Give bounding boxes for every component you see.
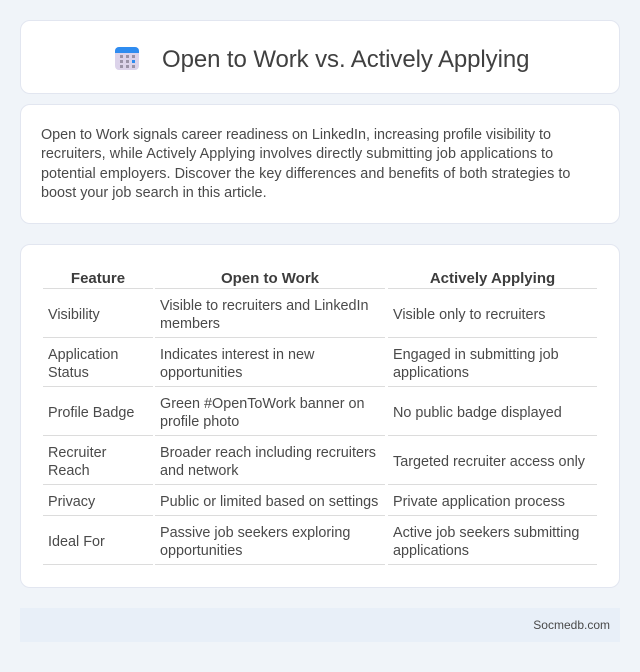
row: profile badge [43,396,597,436]
table header [43,270,597,289]
title: Open to Work vs. Actively Applying [162,46,529,73]
row: application status: Engaged in submitting job [393,347,559,363]
panel: introduction [20,104,620,224]
row: application status: opportunities [160,365,242,381]
row: visibility: Visible to recruiters and LinkedIn [160,298,369,314]
row: application status: Application [48,347,118,363]
row: application status: Indicates interest in new [160,347,314,363]
row: privacy [43,494,597,516]
row: application status: Status [48,365,89,381]
row: ideal for: Ideal For [48,534,105,550]
row: visibility: Visibility [48,307,100,323]
row: recruiter reach: Broader reach including recruiters [160,445,376,461]
panel: title card [20,20,620,94]
intro text: boost your job search in this article. [41,185,267,201]
table header: Actively Applying [430,270,555,287]
panel: comparison table [20,244,620,588]
table header: Open to Work [221,270,319,287]
row: privacy: Privacy [48,494,95,510]
icon: calendar [115,47,139,70]
intro text: potential employers. Discover the key differences and benefits of both strategies to [41,166,570,182]
row: recruiter reach [43,445,597,485]
row: profile badge: No public badge displayed [393,405,562,421]
table header: Feature [71,270,125,287]
row: ideal for: Passive job seekers exploring [160,525,350,541]
intro text [41,127,570,201]
row: recruiter reach: and network [160,463,238,479]
footer bar [20,608,620,642]
row: recruiter reach: Reach [48,463,90,479]
row: ideal for: Active job seekers submitting [393,525,579,541]
row: visibility: Visible only to recruiters [393,307,546,323]
footer text: Socmedb.com [533,618,610,632]
row: profile badge: Profile Badge [48,405,134,421]
row: ideal for: opportunities [160,543,242,559]
row: application status [43,347,597,387]
row: recruiter reach: Recruiter [48,445,106,461]
intro text: recruiters, while Actively Applying involves directly submitting job applications to [41,146,553,162]
row: recruiter reach: Targeted recruiter access only [393,454,585,470]
row: profile badge: profile photo [160,414,239,430]
row: ideal for: applications [393,543,469,559]
intro text: Open to Work signals career readiness on LinkedIn, increasing profile visibility to [41,127,551,143]
row: application status: applications [393,365,469,381]
row: visibility: members [160,316,220,332]
row: profile badge: Green #OpenToWork banner on [160,396,365,412]
row: visibility [43,298,597,338]
row: ideal for [43,525,597,565]
row: privacy: Public or limited based on settings [160,494,378,510]
row: privacy: Private application process [393,494,565,510]
